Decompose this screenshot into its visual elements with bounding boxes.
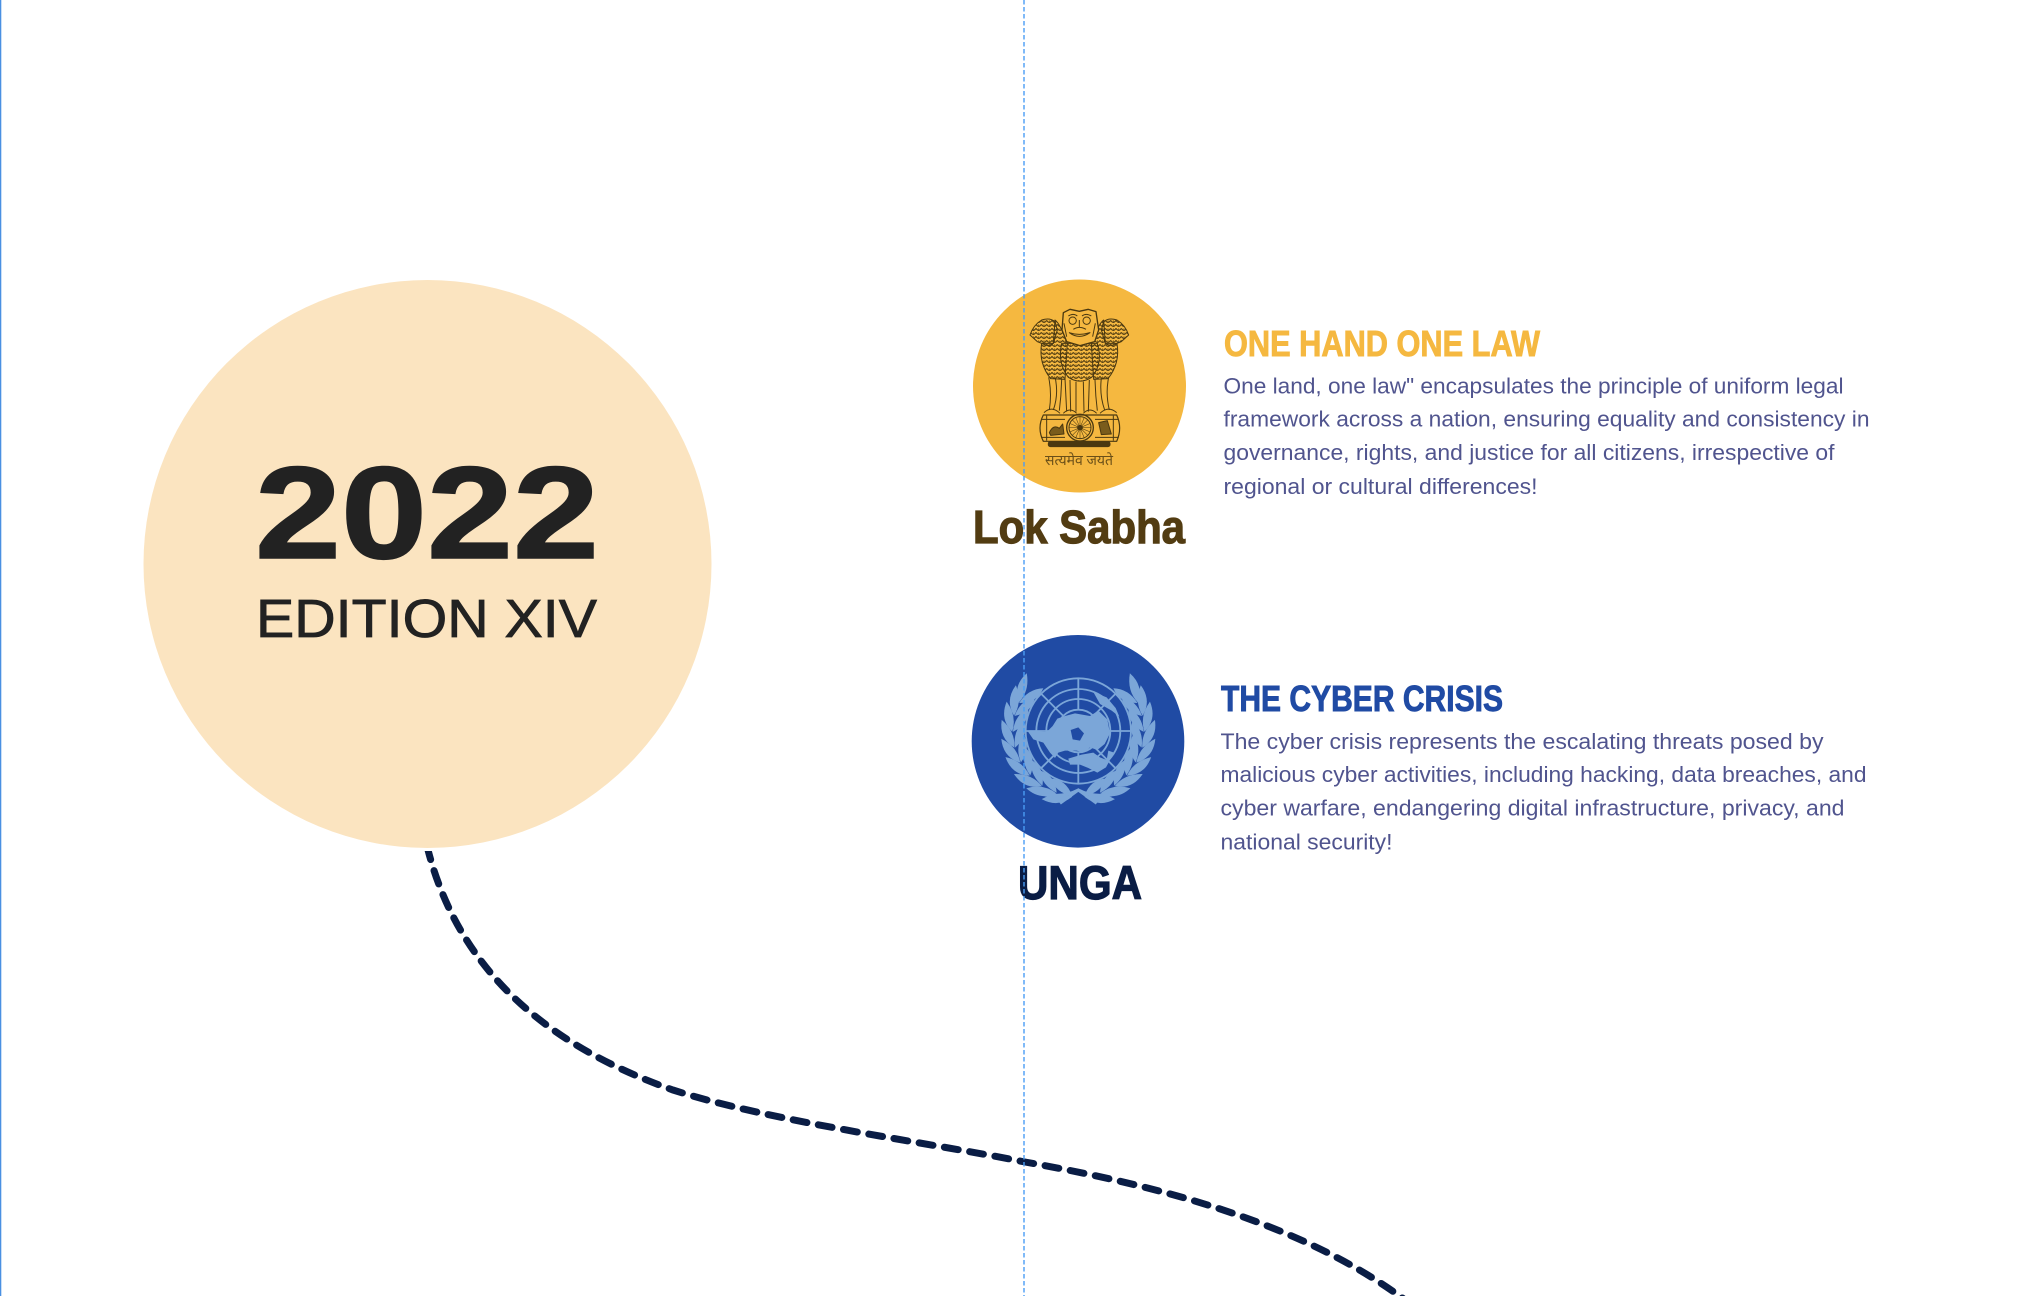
description: cyber warfare, endangering digital infrastructure, privacy, and	[1220, 796, 1844, 820]
blue circle	[972, 635, 1184, 848]
panel: UNGA	[972, 635, 1184, 909]
description: national security!	[1220, 830, 1392, 854]
description: The cyber crisis represents the escalating threats posed by	[1220, 729, 1824, 754]
description: One land, one law" encapsulates the principle of uniform legal	[1224, 374, 1844, 398]
label: Lok Sabha: Lok Sabha	[973, 501, 1185, 553]
description	[1224, 374, 1870, 499]
heading: THE CYBER CRISIS	[1221, 678, 1503, 719]
label: UNGA: UNGA	[1018, 856, 1142, 909]
center guide line	[1023, 0, 1025, 1296]
description: malicious cyber activities, including hacking, data breaches, and	[1220, 762, 1866, 787]
icon: Ashoka lion emblem	[1030, 309, 1129, 447]
heading: ONE HAND ONE LAW	[1224, 323, 1540, 364]
dashed timeline path	[427, 846, 1405, 1296]
year circle	[144, 280, 712, 848]
left guide line	[0, 0, 1, 1296]
description: framework across a nation, ensuring equality and consistency in	[1224, 406, 1870, 432]
emblem motto: सत्यमेव जयते	[1045, 451, 1114, 471]
text block: The Cyber Crisis	[1220, 678, 1866, 854]
year 2022: 2022	[255, 439, 599, 586]
edition label: EDITION XIV	[256, 590, 597, 649]
description: regional or cultural differences!	[1224, 474, 1538, 499]
gold circle	[973, 280, 1186, 492]
icon: United Nations emblem	[1000, 672, 1157, 807]
panel: Lok Sabha	[973, 280, 1186, 553]
text block: One Hand One Law	[1224, 323, 1870, 499]
description: governance, rights, and justice for all citizens, irrespective of	[1224, 440, 1835, 465]
description	[1220, 729, 1866, 854]
